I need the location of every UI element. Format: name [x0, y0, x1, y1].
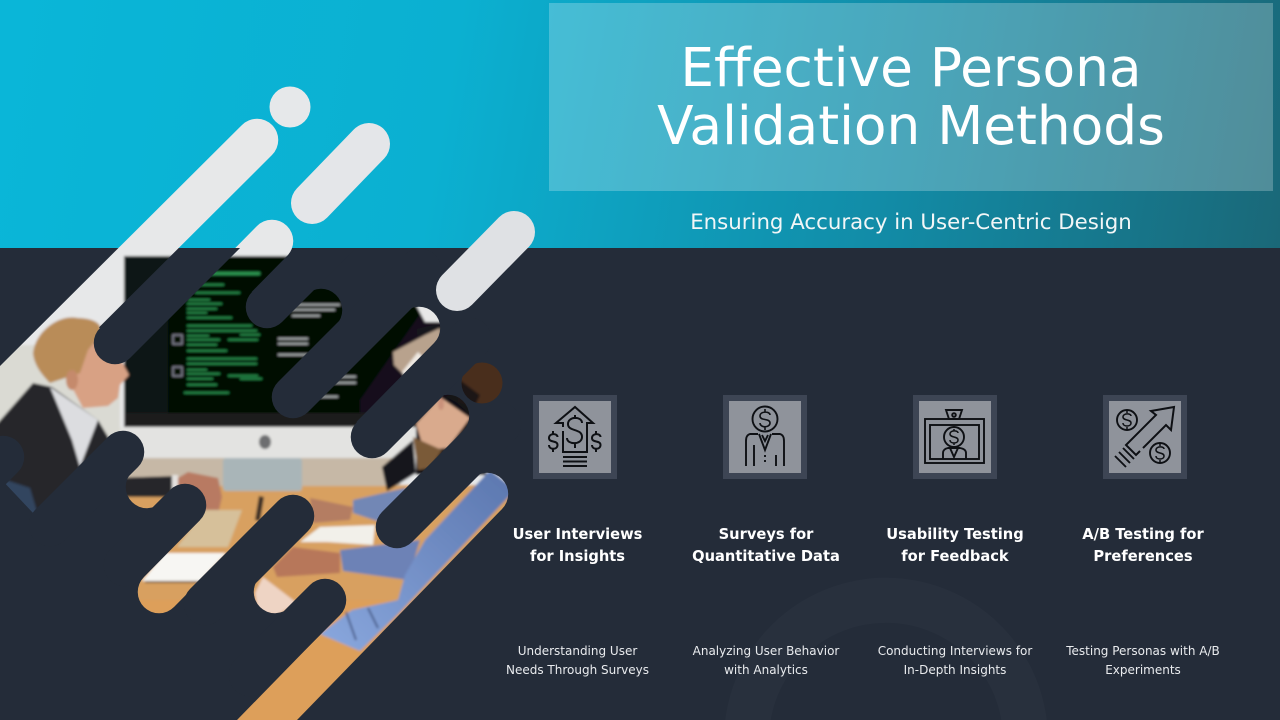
dark diagonal bars [0, 248, 480, 652]
heading: surveys [692, 526, 840, 565]
subtitle: Ensuring Accuracy in User-Centric Design [690, 210, 1132, 235]
upper hand and sleeve [310, 498, 353, 523]
icon: ID badge with dollar head [913, 395, 997, 479]
man [0, 383, 175, 525]
heading: usability testing: for Feedback [901, 548, 1009, 565]
monitor [165, 254, 422, 416]
person right head [416, 395, 486, 475]
heading: usability testing: Usability Testing [886, 526, 1024, 543]
heading: user interviews: for Insights [530, 548, 625, 565]
top teal gradient band [0, 0, 1280, 248]
title panel [549, 3, 1273, 191]
office photo [0, 118, 508, 720]
long blue arm [320, 470, 515, 651]
brown circle [462, 362, 502, 404]
heading: usability testing [886, 526, 1024, 565]
documents on desk [177, 510, 242, 547]
icon: upward arrow with dollars [533, 395, 617, 479]
description: user interviews [506, 644, 649, 677]
description: surveys [692, 644, 840, 677]
wall [20, 118, 506, 488]
description: A/B testing: Testing Personas with A/B [1066, 644, 1220, 658]
icon: businessman with dollar head [723, 395, 807, 479]
photo collage with diagonal rounded bars [0, 86, 535, 720]
white pills [270, 86, 514, 290]
description: A/B testing: Experiments [1105, 663, 1181, 677]
lower hand and sleeve [273, 547, 340, 577]
icon: diagonal growth arrow [1103, 395, 1187, 479]
description: surveys: with Analytics [724, 663, 808, 677]
description: surveys: Analyzing User Behavior [693, 644, 839, 658]
description: usability testing [878, 644, 1032, 677]
description: usability testing: Conducting Interviews for [878, 644, 1032, 658]
heading: A/B testing: A/B Testing for [1082, 526, 1204, 543]
title [657, 36, 1165, 156]
description: user interviews: Understanding User [518, 644, 637, 658]
description: usability testing: In-Depth Insights [904, 663, 1006, 677]
heading: user interviews: User Interviews [513, 526, 642, 543]
description: user interviews: Needs Through Surveys [506, 663, 649, 677]
heading: user interviews [513, 526, 642, 565]
heading: surveys: Quantitative Data [692, 548, 840, 565]
heading: A/B testing: Preferences [1093, 548, 1193, 565]
title: Validation Methods [657, 94, 1165, 156]
heading: surveys: Surveys for [719, 526, 813, 543]
desk [128, 484, 508, 602]
description: A/B testing [1066, 644, 1220, 677]
background ring decoration [700, 560, 1080, 720]
heading: A/B testing [1082, 526, 1204, 565]
title: Effective Persona [680, 36, 1142, 98]
person at back right [359, 315, 452, 413]
screen text lines [184, 272, 262, 394]
